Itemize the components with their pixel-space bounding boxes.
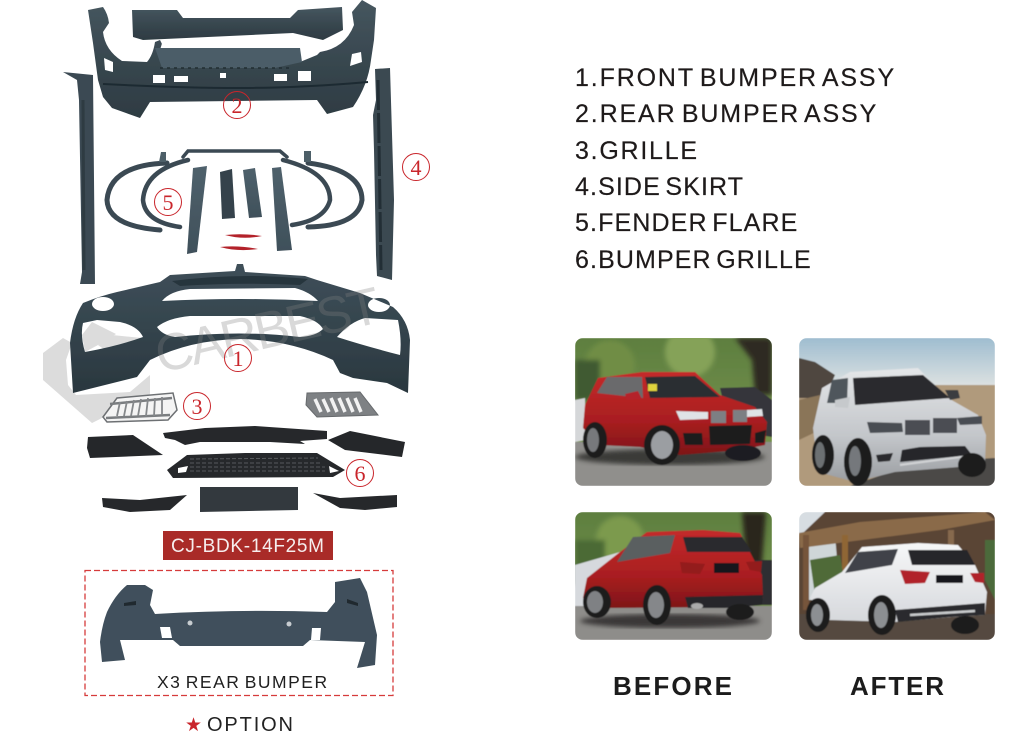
part: left grille [103, 393, 177, 422]
photo: after, silver X3 front [799, 338, 995, 486]
caption: before: BEFORE [613, 671, 732, 701]
parts list [575, 64, 896, 274]
option note: ★ [185, 715, 202, 736]
parts list: 5.FENDER FLARE [575, 209, 798, 237]
part: centre lower strip [163, 426, 327, 445]
callout: number 5 [154, 188, 182, 216]
photo: before, red X3 rear [575, 512, 772, 640]
parts list: 3.GRILLE [575, 137, 699, 165]
callout: number 1 [224, 344, 252, 372]
part: door moulding strips [187, 166, 292, 254]
part: front bumper assembly [70, 264, 410, 393]
part: right side skirt [373, 68, 394, 280]
part: X3 rear bumper [100, 578, 377, 668]
watermark: CARBEST logo [43, 322, 150, 423]
callout: number 4 [402, 154, 430, 180]
parts list: 2.REAR BUMPER ASSY [575, 100, 878, 128]
part: right lower trim [328, 431, 405, 457]
part: left lower lip [102, 495, 187, 512]
parts list: 1.FRONT BUMPER ASSY [575, 64, 896, 92]
callout: number 2: 2 [232, 93, 242, 118]
product code label [163, 531, 333, 560]
callout: number 6: 6 [354, 461, 366, 486]
option note: OPTION [207, 714, 293, 736]
callout: number 6 [346, 460, 374, 486]
caption: X3 rear bumper: X3 REAR BUMPER [157, 672, 329, 692]
panel: optional X3 rear bumper [85, 570, 393, 696]
callout: number 2 [224, 92, 250, 118]
part: licence plate base [200, 487, 298, 512]
callout: number 4: 4 [410, 155, 422, 180]
product code label: CJ-BDK-14F25M [171, 536, 324, 557]
part: right lower lip [313, 493, 397, 510]
watermark: CARBEST wordmark: CARBEST [150, 275, 392, 385]
part: red reflectors [220, 234, 262, 250]
callout: number 5: 5 [162, 190, 174, 215]
photo: after, white X3 rear [799, 512, 995, 640]
part: left lower trim [87, 435, 163, 458]
part: bumper grille [167, 453, 345, 478]
photo: before, red X3 front [575, 327, 772, 486]
part: rear bumper assembly [88, 0, 376, 118]
parts list: 6.BUMPER GRILLE [575, 246, 812, 274]
part: fender flares and top trim [107, 151, 362, 230]
part: right grille [306, 392, 378, 417]
part: left side skirt [63, 72, 95, 284]
callout: number 3: 3 [192, 394, 202, 419]
parts list: 4.SIDE SKIRT [575, 173, 744, 201]
caption: after: AFTER [850, 671, 944, 701]
callout: number 3 [184, 392, 210, 420]
callout: number 1: 1 [232, 346, 244, 371]
